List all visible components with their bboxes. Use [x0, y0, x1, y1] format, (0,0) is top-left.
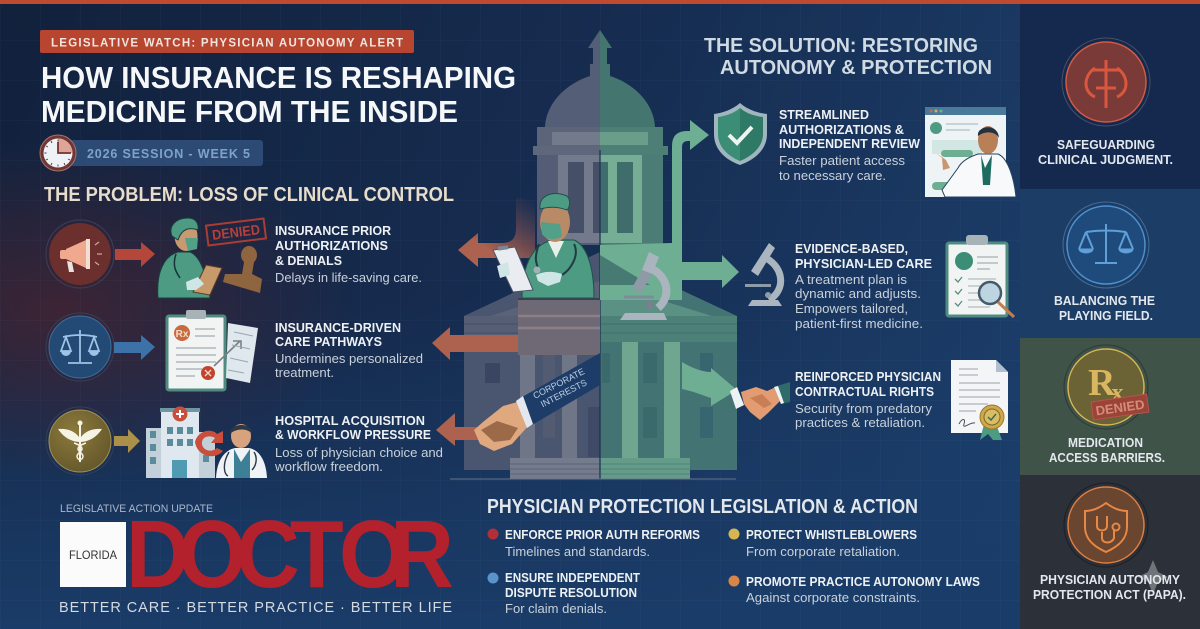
solution heading: [704, 35, 992, 79]
arrow to microscope: [600, 243, 739, 300]
arrow to shield: [672, 120, 709, 262]
row 2 text: treatment.: [275, 366, 334, 380]
solution 1 text: [779, 107, 921, 183]
sleeve: [522, 353, 600, 425]
solution 2 text: PHYSICIAN-LED CARE: [795, 256, 932, 271]
item: whistleblowers: PROTECT WHISTLEBLOWERS: [746, 527, 917, 542]
panel: balancing: BALANCING THE: [1054, 293, 1155, 308]
row 3 text: & WORKFLOW PRESSURE: [275, 427, 431, 442]
panel: papa: PROTECTION ACT (PAPA).: [1033, 587, 1186, 602]
icon: microscope: [745, 243, 782, 306]
title: MEDICINE FROM THE INSIDE: [41, 94, 458, 129]
corporate interests sleeve and handshake: [474, 353, 600, 451]
nurse with clipboard: [158, 218, 222, 298]
central capitol building split illustration: [450, 30, 737, 479]
solution 2 text: A treatment plan is: [795, 273, 907, 287]
item: whistleblowers: From corporate retaliation.: [746, 545, 900, 559]
signed document with seal: [951, 360, 1008, 440]
solution 1 text: AUTHORIZATIONS &: [779, 122, 904, 137]
legislative watch banner: [40, 30, 414, 53]
arrow to workflow: [436, 413, 490, 446]
right column: [1020, 0, 1200, 629]
solution 2: physician-led care: [745, 235, 1014, 331]
panel: safeguarding: SAFEGUARDING: [1057, 137, 1155, 152]
panel: balancing: PLAYING FIELD.: [1059, 308, 1153, 323]
solution 2 text: EVIDENCE-BASED,: [795, 241, 908, 256]
panel: medication access: MEDICATION: [1068, 435, 1143, 450]
row 3 text: HOSPITAL ACQUISITION: [275, 413, 425, 428]
panel: papa: PHYSICIAN AUTONOMY: [1040, 572, 1180, 587]
rubber stamp: [223, 246, 262, 293]
row 2 text: [275, 320, 423, 380]
clipboard with Rx: [167, 310, 258, 390]
item: practice autonomy laws: Against corporate constraints.: [746, 591, 920, 605]
panel: safeguarding: [1020, 4, 1200, 189]
capitol left half: [464, 30, 600, 479]
central physician figure: [493, 194, 594, 298]
item: independent dispute resolution: ENSURE INDEPENDENT: [505, 570, 640, 585]
legislation and action panel: [487, 496, 980, 616]
clipboard with magnifier: [947, 235, 1014, 317]
denied stamp mark: DENIED: [211, 221, 261, 243]
row 1 text: Delays in life-saving care.: [275, 271, 422, 285]
green solution arrows: [600, 120, 739, 406]
item: practice autonomy laws: PROMOTE PRACTICE AUTONOMY LAWS: [746, 574, 980, 589]
session pill with clock: 2026 SESSION - WEEK 5: [87, 147, 250, 161]
document behind: [226, 323, 258, 383]
hospital building: [146, 406, 223, 478]
solution 3: contractual rights: [730, 360, 1008, 440]
hand left: [474, 401, 530, 451]
florida doctor logo block: FLORIDA: [69, 548, 117, 562]
icon: shield: [714, 103, 767, 165]
panel: medication access: x: [1111, 380, 1123, 406]
item: independent dispute resolution: [488, 570, 640, 616]
row 2 text: INSURANCE-DRIVEN: [275, 320, 401, 335]
sleeve label: CORPORATE: [531, 366, 586, 401]
solution 3 text: Security from predatory: [795, 402, 933, 416]
red problem arrows: [432, 198, 535, 446]
legislative watch banner: LEGISLATIVE WATCH: PHYSICIAN AUTONOMY ALERT: [51, 38, 403, 50]
icon: scales circle: [46, 313, 114, 381]
solution 3 text: REINFORCED PHYSICIAN: [795, 369, 941, 384]
icon: clock: [40, 135, 76, 171]
arrow: [114, 429, 140, 453]
panel: balancing: [1020, 189, 1200, 338]
row 1 text: & DENIALS: [275, 253, 342, 268]
panel: medication access: ACCESS BARRIERS.: [1049, 450, 1165, 465]
arrow to handshake: [682, 362, 737, 406]
solution 2 text: patient-first medicine.: [795, 317, 923, 331]
item: practice autonomy laws: [728, 574, 980, 605]
panel: medication access: [1020, 338, 1200, 475]
solution 1 text: Faster patient access: [779, 154, 905, 168]
title: [41, 60, 516, 129]
panel: papa: [1020, 475, 1200, 629]
icon: megaphone circle: [46, 220, 114, 288]
solution 3 text: CONTRACTUAL RIGHTS: [795, 384, 934, 399]
session pill with clock: [40, 135, 263, 171]
solution 1: streamlined authorizations: [714, 103, 1016, 197]
florida doctor logo block: DOCTOR: [126, 501, 454, 608]
item: whistleblowers: [728, 527, 917, 559]
arrow to pathways: [432, 327, 518, 360]
solution 1 text: INDEPENDENT REVIEW: [779, 136, 921, 151]
row 1: prior authorizations: [46, 218, 422, 298]
central podium: [518, 298, 600, 355]
florida doctor logo block: BETTER CARE · BETTER PRACTICE · BETTER LIFE: [59, 600, 452, 616]
panel: safeguarding: CLINICAL JUDGMENT.: [1038, 152, 1173, 167]
solution 2 text: Empowers tailored,: [795, 302, 908, 316]
item: independent dispute resolution: DISPUTE RESOLUTION: [505, 585, 637, 600]
row 1 text: [275, 223, 422, 285]
central microscope: [620, 252, 667, 320]
capitol right half: [600, 30, 737, 479]
icon: caduceus circle: [46, 407, 114, 475]
solution 1 text: to necessary care.: [779, 169, 886, 183]
row 3 text: [274, 413, 443, 474]
row 3 text: Loss of physician choice and: [275, 446, 443, 460]
solution 3 text: practices & retaliation.: [795, 416, 925, 430]
doctor with digital screen: [925, 107, 1016, 197]
item: prior auth reforms: Timelines and standards.: [505, 545, 650, 559]
clipboard with Rx: Rx: [176, 329, 189, 340]
row 2 text: CARE PATHWAYS: [275, 334, 382, 349]
solution 2 text: [795, 241, 932, 331]
solution heading: THE SOLUTION: RESTORING: [704, 35, 978, 57]
icon: handshake: [730, 382, 790, 420]
item: prior auth reforms: [488, 527, 700, 559]
item: independent dispute resolution: For claim denials.: [505, 602, 607, 616]
row 1 text: INSURANCE PRIOR: [275, 223, 392, 238]
solution 1 text: STREAMLINED: [779, 107, 869, 122]
row 2: care pathways: [46, 310, 423, 390]
section heading: PHYSICIAN PROTECTION LEGISLATION & ACTION: [487, 496, 918, 518]
solution 2 text: dynamic and adjusts.: [795, 287, 921, 301]
arrow: [114, 335, 155, 360]
solution heading: AUTONOMY & PROTECTION: [720, 57, 992, 79]
arrow: [115, 242, 155, 267]
florida doctor logo block: LEGISLATIVE ACTION UPDATE: [60, 503, 213, 515]
panel: medication access: DENIED: [1095, 397, 1145, 418]
row 2 text: Undermines personalized: [275, 352, 423, 366]
row 3: hospital acquisition: [46, 406, 443, 478]
item: prior auth reforms: ENFORCE PRIOR AUTH REFORMS: [505, 527, 700, 542]
arrow to denials: [458, 198, 535, 267]
row 3 text: workflow freedom.: [274, 460, 383, 474]
cuff: [516, 396, 533, 428]
problem heading: THE PROBLEM: LOSS OF CLINICAL CONTROL: [44, 184, 454, 206]
row 1 text: AUTHORIZATIONS: [275, 238, 388, 253]
title: HOW INSURANCE IS RESHAPING: [41, 60, 516, 95]
solution 3 text: [795, 369, 941, 430]
panel: medication access: R: [1088, 362, 1115, 404]
sleeve label: INTERESTS: [539, 377, 588, 409]
doctor figure: [216, 424, 267, 478]
